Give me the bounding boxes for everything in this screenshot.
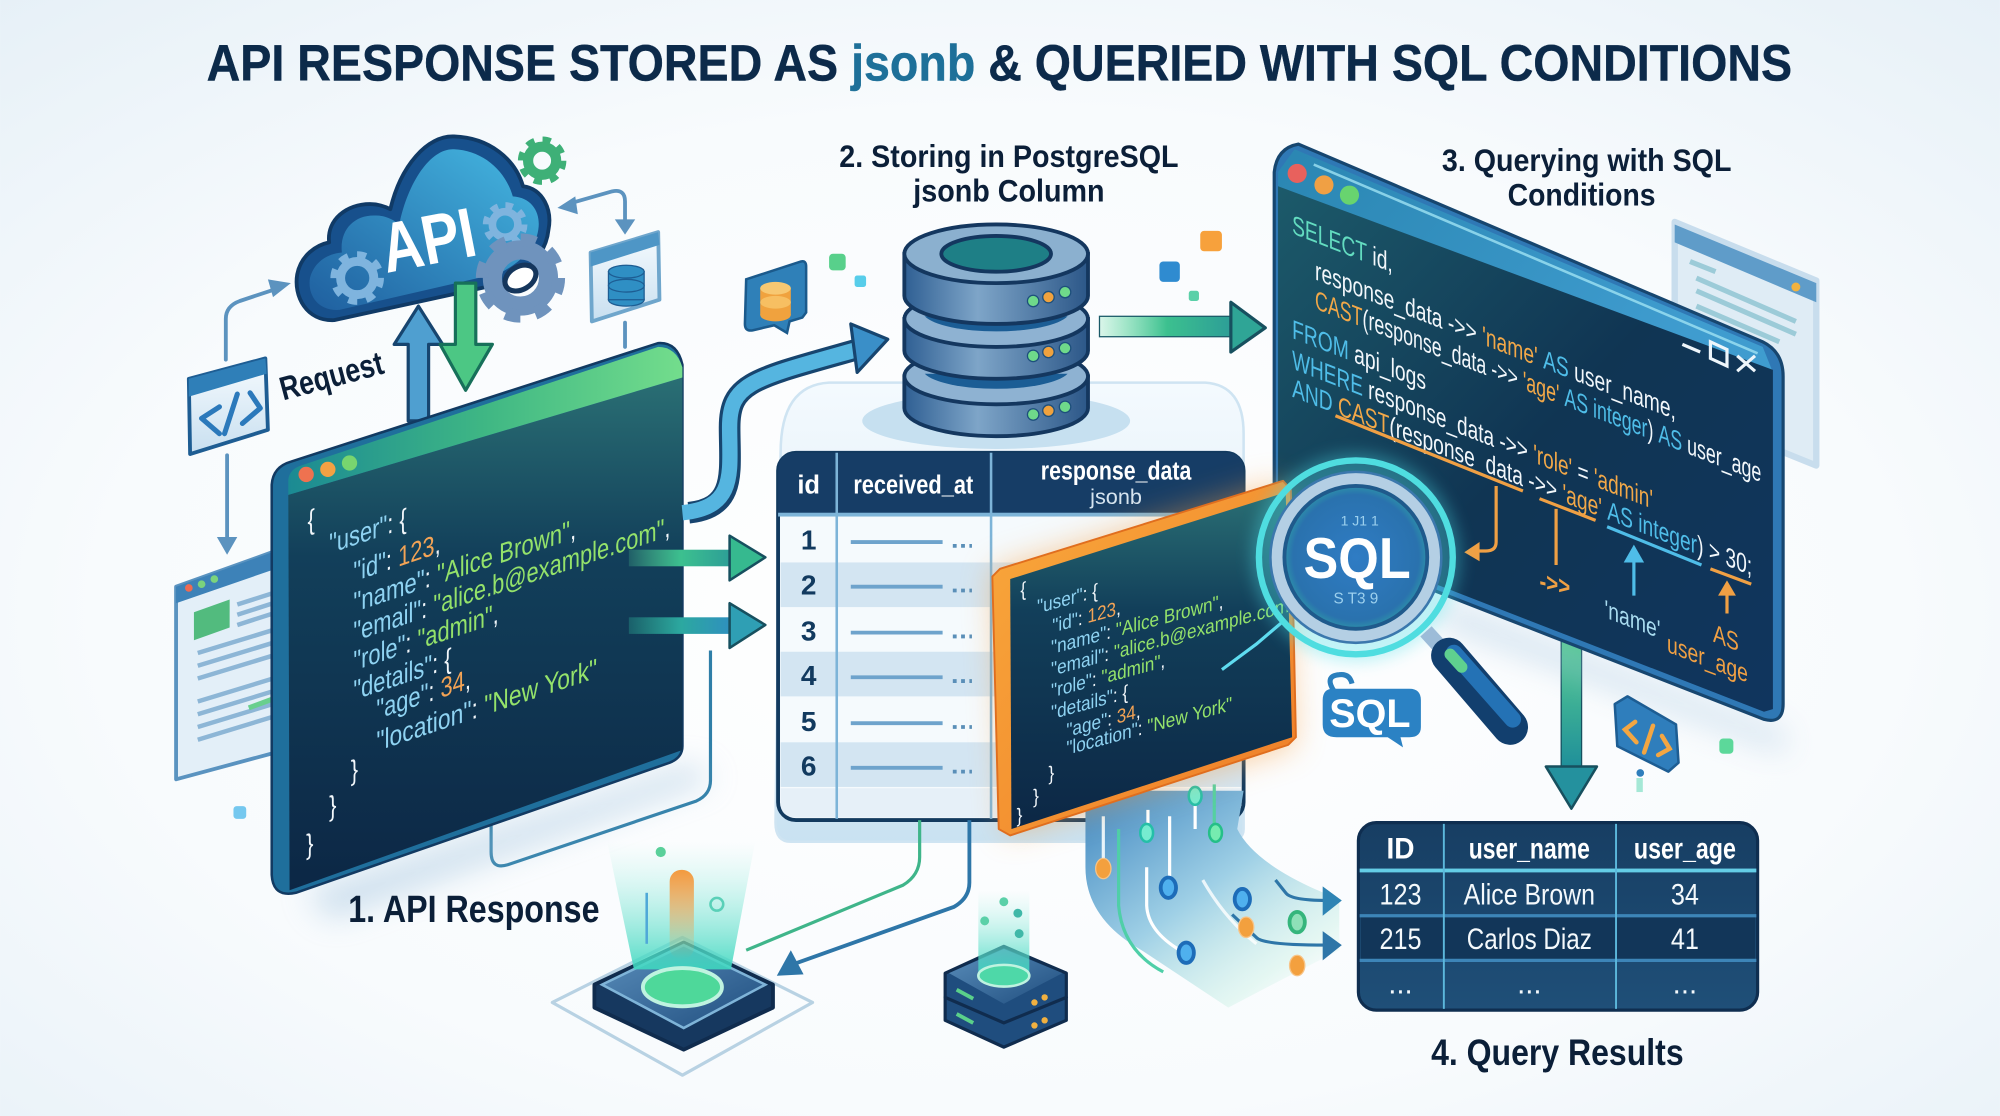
json code: }	[351, 754, 358, 787]
heading: step 3: 3. Querying with SQL	[1442, 142, 1731, 178]
row numbers: 1	[801, 525, 816, 556]
header labels: response_data	[1041, 458, 1192, 486]
icon: magnifying glass: 1 J1 1	[1341, 512, 1379, 528]
arrow: curved blue to database	[682, 324, 888, 513]
header labels: jsonb	[1089, 484, 1142, 509]
striped rows	[781, 562, 1241, 818]
header labels: received_at	[853, 472, 974, 500]
flow lines	[1103, 784, 1327, 972]
panel: orange jsonb panel	[992, 481, 1296, 835]
results header: user_name	[1469, 832, 1590, 865]
json code: "role": "admin",	[353, 598, 499, 677]
icon: document page	[176, 551, 276, 779]
results rows	[1379, 878, 1699, 1001]
json code: }	[329, 790, 337, 823]
icon: speech bubble database	[745, 261, 806, 333]
heading: step 4: 4. Query Results	[1431, 1032, 1684, 1073]
sql code: FROM api_logs	[1292, 314, 1426, 397]
json code: "email": "alice.b@example.com",	[353, 512, 670, 648]
row numbers	[801, 525, 817, 781]
panel: table backing card	[776, 383, 1244, 842]
icon: magnifying glass: S T3 9	[1333, 590, 1378, 607]
icon: hologram platform	[552, 842, 813, 1075]
json snippet: "age": 34,	[1066, 699, 1141, 741]
table: jsonb storage	[778, 453, 1244, 820]
sql code: SELECT id,	[1292, 210, 1393, 279]
annotation labels: AS	[1713, 619, 1739, 657]
heading: step 2	[839, 138, 1179, 209]
results rows: 215	[1379, 923, 1422, 956]
floating icons near database	[745, 231, 1222, 333]
json code: "user": {	[329, 504, 407, 560]
icon: database cylinder	[862, 224, 1130, 449]
results header: user_age	[1634, 832, 1736, 865]
json code: }	[306, 828, 314, 861]
icon: database tile	[591, 232, 659, 321]
api label: API	[374, 193, 482, 288]
panel: API cloud with connected icons	[176, 136, 659, 819]
json snippet: {	[1020, 577, 1026, 601]
sql code: response_data ->> 'name' AS user_name,	[1315, 256, 1676, 426]
row numbers: 5	[801, 706, 816, 737]
json snippet: "location": "New York"	[1066, 692, 1232, 759]
results rows: Alice Brown	[1464, 878, 1595, 911]
row numbers: 3	[801, 615, 816, 646]
arrow: teal to table row	[629, 603, 765, 648]
json snippet: }	[1033, 784, 1039, 808]
json snippet: }	[1017, 803, 1022, 827]
table: query results	[1358, 823, 1758, 1010]
glowing pointer	[1222, 622, 1282, 670]
json snippet: "email": "alice.b@example.com"	[1051, 592, 1295, 680]
flow nodes	[1096, 787, 1305, 976]
shadow: query terminal	[1441, 599, 1786, 753]
title: API RESPONSE STORED AS jsonb & QUERIED WITH SQL CONDITIONS	[207, 34, 1792, 91]
icon: large gear	[482, 240, 559, 316]
request label: Request	[276, 345, 388, 408]
icon: code tile	[189, 358, 268, 454]
icon: SQL bubble	[1323, 675, 1421, 747]
lens text: SQL	[1304, 527, 1411, 591]
icon: code tile orange	[1615, 696, 1679, 772]
results rows: Carlos Diaz	[1467, 923, 1592, 956]
json snippet: "name": "Alice Brown",	[1051, 590, 1223, 658]
row numbers: 2	[801, 569, 816, 600]
handle	[1426, 631, 1513, 727]
icon: magnifying glass	[1251, 453, 1513, 727]
flow ribbon to results	[1085, 784, 1342, 1008]
json code: "location": "New York"	[376, 654, 597, 758]
heading: step 3: Conditions	[1508, 176, 1656, 212]
header labels: id	[797, 472, 820, 500]
arrow: database to query	[1099, 302, 1265, 352]
json snippet: "id": 123,	[1052, 596, 1121, 637]
icon: gear in cloud right	[486, 205, 524, 244]
glow: orange panel	[992, 481, 1295, 835]
heading: step 2: jsonb Column	[912, 173, 1105, 209]
results header: ID	[1386, 832, 1415, 865]
json code: "id": 123,	[353, 528, 441, 588]
annotation labels: 'name'	[1605, 594, 1660, 644]
annotation labels: user_age	[1667, 629, 1748, 688]
header labels	[797, 458, 1192, 509]
results rows: 41	[1671, 923, 1699, 956]
annotation labels	[1540, 566, 1748, 688]
icon: cloud	[297, 136, 549, 320]
arrow: response down	[440, 283, 492, 390]
results rows: ...	[1517, 968, 1542, 1001]
lines from table to platform	[746, 820, 969, 976]
results rows: ...	[1388, 968, 1413, 1001]
json snippet: "details": {	[1051, 681, 1128, 724]
row placeholders	[851, 542, 972, 772]
sql code: AND CAST(response_data ->> 'age' AS integer) > 30;	[1292, 373, 1752, 582]
connector: terminal bottom to right	[491, 650, 710, 866]
panel: SQL query terminal	[1274, 144, 1783, 720]
small decorative dots	[1636, 738, 1733, 792]
results rows: 34	[1671, 878, 1699, 911]
json snippet: }	[1048, 761, 1054, 785]
results rows: ...	[1673, 968, 1697, 1001]
arrowheads of connectors	[217, 196, 635, 555]
heading: step 3	[1442, 142, 1731, 212]
row numbers: 4	[801, 660, 817, 691]
annotation underlines and arrows	[1335, 416, 1751, 613]
sql code: CAST(response_data ->> 'age' AS integer) AS user_age	[1315, 285, 1761, 489]
sql code	[1292, 210, 1761, 582]
results header	[1386, 832, 1736, 865]
json code	[306, 504, 670, 861]
arrow: request up	[394, 306, 443, 421]
shadow: terminal 1	[306, 765, 714, 918]
json snippet	[1017, 577, 1295, 827]
row numbers: 6	[801, 750, 816, 781]
arrow: green to table row	[629, 536, 765, 580]
heading: step 1: 1. API Response	[348, 888, 600, 931]
window controls	[1682, 342, 1755, 371]
panel: query terminal backdrop window	[1675, 222, 1816, 466]
json code: "age": 34,	[376, 664, 471, 726]
json code: "details": {	[353, 643, 452, 707]
annotation labels: ->>	[1540, 566, 1570, 602]
table header	[778, 453, 1244, 515]
panel: api response terminal	[272, 343, 682, 894]
arrow: query down to results	[1546, 625, 1597, 809]
connector lines around cloud	[226, 191, 625, 543]
icon: small server	[945, 890, 1066, 1047]
heading: step 2: 2. Storing in PostgreSQL	[839, 138, 1179, 174]
results rows: 123	[1379, 878, 1422, 911]
json code: {	[307, 504, 315, 537]
icon: gear in cloud left	[334, 255, 380, 301]
json snippet: "role": "admin",	[1051, 649, 1165, 702]
icon: green gear	[522, 140, 563, 181]
sql code: WHERE response_data ->> 'role' = 'admin'	[1292, 345, 1653, 516]
json snippet: "user": {	[1037, 579, 1098, 618]
json code: "name": "Alice Brown",	[353, 514, 576, 619]
small square	[233, 806, 246, 819]
icon: SQL bubble: SQL	[1329, 692, 1410, 736]
